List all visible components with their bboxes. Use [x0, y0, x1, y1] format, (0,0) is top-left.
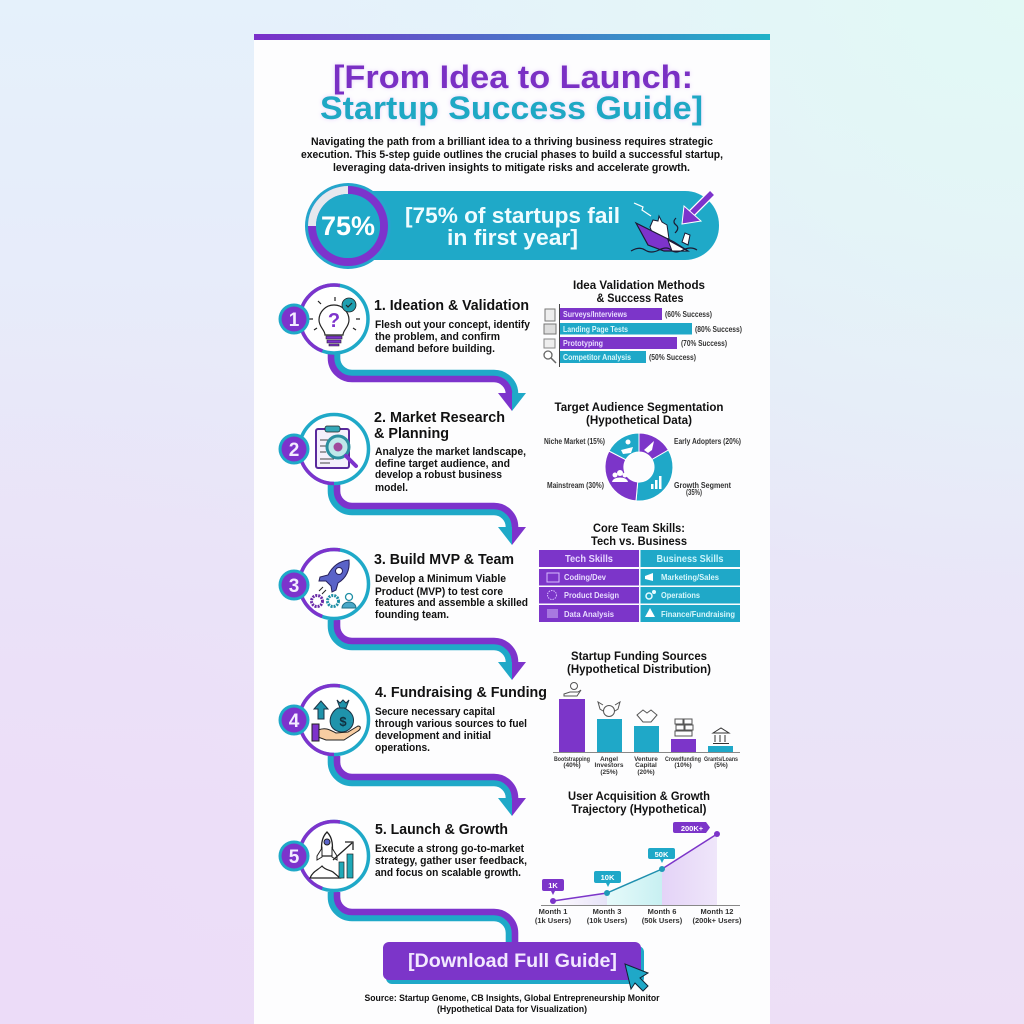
- number badge 2: [278, 434, 310, 464]
- title: Startup Success Guide]: [320, 90, 703, 126]
- funding labels: Grants/Loans: [704, 756, 738, 763]
- connector arrow 2: [331, 484, 526, 545]
- icon: light bulb: [300, 285, 368, 353]
- donut chart: target audience segmentation: [544, 400, 741, 501]
- funding labels: Bootstrapping: [554, 756, 590, 763]
- step 5: launch and growth: [278, 821, 527, 890]
- step 3 text: Develop a Minimum Viable: [375, 573, 506, 585]
- chart title: Startup Funding Sources: [571, 649, 707, 663]
- step 4 text: operations.: [375, 742, 430, 754]
- chart title: [591, 521, 687, 548]
- number badge 4: [278, 704, 310, 736]
- month labels: (1k Users): [535, 916, 572, 925]
- row: surveys: (60% Success): [665, 310, 712, 319]
- bar chart: idea validation methods: [544, 278, 742, 367]
- step 1: ideation and validation: [278, 285, 531, 355]
- funding labels: Capital: [635, 762, 657, 769]
- panel: main sheet: [254, 34, 770, 1024]
- funding labels: Crowdfunding: [665, 756, 701, 763]
- funding labels: Investors: [595, 762, 624, 769]
- bar chart: startup funding sources: [553, 649, 740, 776]
- callout: 75% of startups fail: [305, 183, 719, 269]
- step 1 text: Flesh out your concept, identify: [375, 319, 531, 331]
- step 2 text: [374, 409, 526, 494]
- icon: clipboard and magnifier: [300, 414, 368, 484]
- chart title: [568, 789, 710, 816]
- step 3 text: [374, 551, 528, 621]
- table: core team skills: [539, 521, 740, 622]
- source note: [364, 993, 660, 1015]
- line chart: user acquisition and growth: [535, 789, 742, 925]
- month labels: [535, 907, 742, 925]
- step 2 text: model.: [375, 482, 408, 494]
- callout text: in first year]: [447, 225, 578, 250]
- step 4 text: [375, 684, 547, 754]
- source note: (Hypothetical Data for Visualization): [437, 1004, 587, 1015]
- step 2 text: & Planning: [374, 425, 449, 442]
- funding icons: [564, 682, 729, 744]
- row: landing page tests: (80% Success): [695, 325, 742, 334]
- row: landing page tests: [544, 323, 742, 334]
- source note: Source: Startup Genome, CB Insights, Global Entrepreneurship Monitor: [364, 993, 660, 1004]
- button: download full guide: [Download Full Guide]: [408, 951, 617, 972]
- callouts: 200K+: [681, 824, 704, 833]
- chart title: [554, 400, 724, 427]
- step 3 text: founding team.: [375, 609, 449, 621]
- callout text: [405, 203, 620, 250]
- donut gauge 75%: 75%: [321, 211, 375, 241]
- funding labels: (25%): [600, 769, 618, 776]
- donut labels: [544, 437, 741, 497]
- icon: hand with money bag: [300, 686, 368, 754]
- row: surveys: [545, 308, 712, 321]
- intro text: [301, 136, 723, 174]
- step 2 text: develop a robust business: [375, 469, 502, 481]
- business skills column: Business Skills: [656, 553, 724, 565]
- donut icons: [612, 440, 662, 489]
- row: prototyping: [544, 337, 727, 349]
- step 1 text: the problem, and confirm: [375, 331, 500, 343]
- connector to download button: [331, 892, 515, 944]
- chart title: User Acquisition & Growth: [568, 789, 710, 803]
- month labels: Month 1: [539, 907, 567, 916]
- connector arrow 3: [331, 620, 526, 680]
- connector arrow 1: [331, 354, 526, 411]
- funding labels: (20%): [637, 769, 655, 776]
- funding labels: (40%): [563, 762, 581, 769]
- top gradient bar: [254, 34, 770, 40]
- icon: sinking ship and arrow: [631, 193, 712, 252]
- step 4 text: through various sources to fuel: [375, 718, 527, 730]
- callouts: [542, 822, 710, 895]
- step 5 text: and focus on scalable growth.: [375, 867, 521, 879]
- title: [320, 59, 703, 126]
- number badge 1: 1: [289, 310, 300, 331]
- donut labels: (35%): [686, 488, 702, 497]
- month labels: Month 3: [593, 907, 621, 916]
- tech skills column: Tech Skills: [565, 553, 613, 565]
- business skills column: Operations: [661, 591, 701, 600]
- icon: rocket, gears, person: [300, 550, 368, 618]
- icon: hand with money bag: $: [339, 714, 347, 729]
- business skills column: [640, 550, 740, 622]
- row: landing page tests: Landing Page Tests: [563, 325, 628, 334]
- intro text: Navigating the path from a brilliant idea to a thriving business requires strategic: [311, 136, 713, 148]
- step 4: fundraising and funding: [278, 684, 547, 754]
- step 2 text: 2. Market Research: [374, 409, 505, 426]
- step 1 text: 1. Ideation & Validation: [374, 297, 529, 314]
- funding labels: (5%): [714, 762, 728, 769]
- number badge 3: [278, 570, 310, 600]
- step 1 text: [374, 297, 531, 355]
- row: prototyping: Prototyping: [563, 339, 603, 348]
- chart title: [567, 649, 711, 676]
- donut labels: Mainstream (30%): [547, 481, 604, 490]
- intro text: leveraging data-driven insights to mitigate risks and accelerate growth.: [333, 162, 690, 174]
- chart title: Target Audience Segmentation: [554, 400, 724, 414]
- step 5 text: Execute a strong go-to-market: [375, 843, 524, 855]
- month labels: Month 12: [701, 907, 733, 916]
- button: download full guide: [383, 942, 648, 991]
- chart title: (Hypothetical Data): [586, 413, 692, 427]
- tech skills column: Data Analysis: [564, 610, 615, 619]
- step 3 text: Product (MVP) to test core: [375, 586, 503, 598]
- row: competitor analysis: Competitor Analysis: [563, 353, 631, 362]
- row: competitor analysis: (50% Success): [649, 353, 696, 362]
- row: surveys: Surveys/Interviews: [563, 310, 627, 319]
- number badge 2: 2: [289, 440, 299, 461]
- chart title: [573, 278, 705, 305]
- month labels: Month 6: [648, 907, 676, 916]
- bars: [553, 699, 740, 752]
- callouts: 10K: [601, 873, 615, 882]
- title: [From Idea to Launch:: [333, 59, 693, 95]
- funding labels: Angel: [600, 756, 618, 763]
- step 3: build mvp and team: [278, 550, 528, 621]
- funding labels: [554, 756, 738, 776]
- step 5 text: [375, 821, 527, 879]
- donut labels: Early Adopters (20%): [674, 437, 741, 446]
- step 5 text: strategy, gather user feedback,: [375, 855, 527, 867]
- intro text: execution. This 5-step guide outlines the crucial phases to build a successful startup,: [301, 149, 723, 161]
- callouts: 50K: [655, 850, 669, 859]
- month labels: (200k+ Users): [692, 916, 742, 925]
- icon: cursor: [625, 964, 648, 991]
- number badge 3: 3: [289, 576, 299, 597]
- number badge 5: [278, 840, 310, 872]
- chart title: Core Team Skills:: [593, 521, 685, 535]
- icon: rocket launch with growth bars: [300, 822, 368, 890]
- number badge 1: [278, 304, 310, 334]
- month labels: (50k Users): [642, 916, 683, 925]
- growth line: [550, 831, 720, 904]
- donut segments: [605, 433, 673, 501]
- callouts: 1K: [548, 881, 558, 890]
- step 1 text: demand before building.: [375, 343, 495, 355]
- step 3 text: 3. Build MVP & Team: [374, 551, 514, 568]
- step 4 text: Secure necessary capital: [375, 706, 495, 718]
- step 4 text: development and initial: [375, 730, 491, 742]
- area fill: [553, 834, 717, 905]
- donut gauge 75%: [305, 183, 391, 269]
- chart title: (Hypothetical Distribution): [567, 662, 711, 676]
- step 5 text: 5. Launch & Growth: [375, 821, 508, 838]
- tech skills column: [539, 550, 639, 622]
- tech skills column: Coding/Dev: [564, 573, 607, 582]
- step 2: market research and planning: [278, 409, 526, 494]
- number badge 5: 5: [289, 847, 300, 868]
- step 4 text: 4. Fundraising & Funding: [375, 684, 547, 701]
- donut labels: Growth Segment: [674, 481, 731, 490]
- step 3 text: features and assemble a skilled: [375, 597, 528, 609]
- step 2 text: define target audience, and: [375, 458, 510, 470]
- chart title: Trajectory (Hypothetical): [572, 802, 707, 816]
- row: prototyping: (70% Success): [681, 339, 727, 348]
- business skills column: Finance/Fundraising: [661, 610, 735, 619]
- business skills column: Marketing/Sales: [661, 573, 720, 582]
- month labels: (10k Users): [587, 916, 628, 925]
- chart title: & Success Rates: [596, 291, 684, 305]
- funding labels: (10%): [674, 762, 692, 769]
- icon: light bulb: ?: [328, 310, 340, 332]
- donut labels: Niche Market (15%): [544, 437, 605, 446]
- chart title: Idea Validation Methods: [573, 278, 705, 292]
- funding labels: Venture: [634, 756, 658, 763]
- number badge 4: 4: [289, 711, 300, 732]
- chart title: Tech vs. Business: [591, 534, 687, 548]
- step 2 text: Analyze the market landscape,: [375, 446, 526, 458]
- callout text: [75% of startups fail: [405, 203, 620, 228]
- tech skills column: Product Design: [564, 591, 619, 600]
- connector arrow 4: [331, 756, 526, 816]
- row: competitor analysis: [544, 351, 696, 363]
